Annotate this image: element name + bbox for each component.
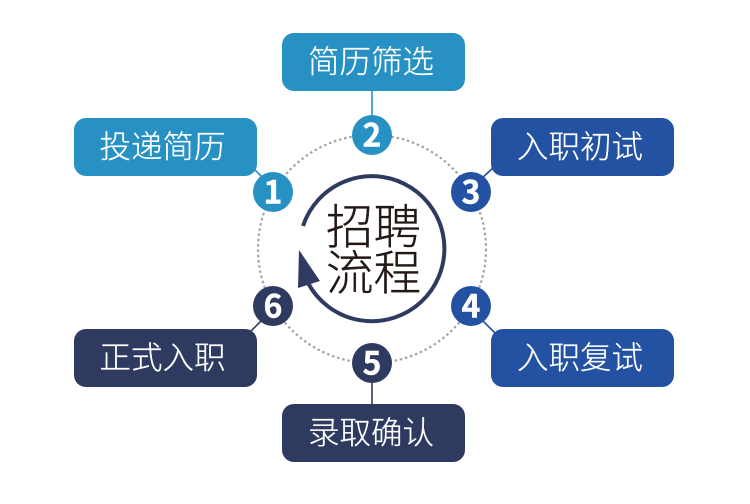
center title — [326, 189, 421, 304]
label box: 录取确认 — [282, 404, 465, 462]
label box: 正式入职 — [74, 329, 257, 387]
label box: 入职初试 — [491, 118, 674, 176]
label box: 简历筛选 — [282, 33, 465, 91]
number badge 6 — [253, 282, 293, 328]
step 4 — [451, 282, 674, 387]
number badge 5: 5 — [363, 338, 381, 384]
number badge 3 — [451, 168, 491, 214]
center title: 流程 — [326, 235, 421, 304]
center: recruitment process cycle — [298, 176, 444, 321]
cycle arrow — [298, 176, 444, 321]
step 3 — [451, 118, 674, 214]
label box: 录取确认: 录取确认 — [308, 408, 434, 454]
step 1 — [74, 118, 293, 214]
number badge 4: 4 — [462, 282, 480, 328]
step 2 — [282, 33, 465, 156]
label box: 入职复试 — [491, 329, 674, 387]
center title: 招聘 — [326, 189, 421, 258]
step 6 — [74, 282, 293, 387]
label box: 入职初试: 入职初试 — [517, 122, 643, 168]
label box: 入职复试: 入职复试 — [517, 332, 643, 378]
number badge 2: 2 — [363, 110, 381, 156]
label box: 投递简历: 投递简历 — [99, 122, 226, 168]
number badge 2 — [352, 110, 392, 156]
number badge 3: 3 — [462, 168, 480, 214]
number badge 6: 6 — [264, 282, 282, 328]
label box: 简历筛选: 简历筛选 — [308, 36, 434, 82]
number badge 5 — [352, 338, 392, 384]
number badge 1 — [253, 168, 293, 214]
label box: 投递简历 — [74, 118, 257, 176]
step 5 — [282, 338, 465, 462]
number badge 4 — [451, 282, 491, 328]
number badge 1: 1 — [264, 168, 282, 214]
label box: 正式入职: 正式入职 — [99, 332, 226, 378]
